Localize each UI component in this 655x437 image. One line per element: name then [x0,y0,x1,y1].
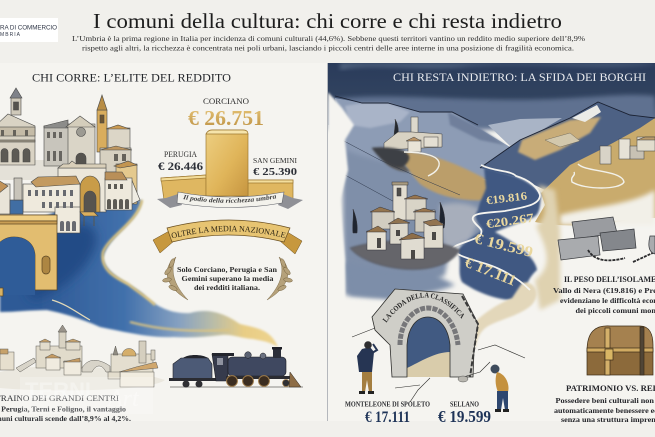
road values [465,192,533,286]
panel: chi resta indietro [328,63,655,424]
heading: chi corre: CHI CORRE: L’ELITE DEL REDDITO [32,70,231,84]
panel: chi corre [0,74,303,422]
san gemini label: SAN GEMINI [253,156,297,165]
title: I comuni della cultura: chi corre e chi resta indietro [93,9,562,33]
illustration: worried figures [357,341,509,412]
palazzo [44,126,70,166]
ribbon: podio: Il podio della ricchezza umbra [183,194,276,203]
corciano label: CORCIANO [203,96,249,106]
left cream edge [328,92,354,300]
ribbon: podio [157,192,303,209]
san gemini value: € 25.390 [253,166,298,178]
perugia value: € 26.446 [158,161,203,173]
road values: €20.267 [485,211,535,231]
perugia label: PERUGIA [164,150,197,159]
podio chart [157,98,303,209]
icon: stone blocks with chain [558,217,655,262]
text: il peso dell'isolamento [553,274,655,315]
road values: € 19.599 [472,231,535,261]
text: oltre la media: Gemini superano la media [182,274,274,283]
illustration: Perugia city skyline [0,88,140,233]
gold tower [97,110,107,152]
text: oltre la media: Solo Corciano, Perugia e San [177,265,278,274]
text: patrimonio vs reddito [554,383,655,424]
logo: Camera di Commercio dell'Umbria: RA DI COMMERCIO [0,24,57,32]
laurel wreaths [162,257,293,300]
arch title: LA CODA DELLA CLASSIFICA [382,292,464,323]
watermark: Art [106,386,140,412]
intro text: rispetto agli altri, la ricchezza è concentrata nei poli urbani, lasciando i piccoli centri delle aree interne in una posizione di fragilità economica. [82,44,574,52]
illustration: lower village [350,182,460,269]
comune labels and values [345,402,491,426]
text: oltre la media [177,267,277,290]
road values: €19.816 [486,190,528,207]
heading: chi resta indietro: CHI RESTA INDIETRO: LA SFIDA DEI BORGHI [393,70,646,84]
cathedral [0,114,35,165]
podium blocks [161,130,293,200]
comune labels and values: € 19.599 [438,407,491,426]
front houses [23,184,80,212]
watercolor stream [0,200,278,347]
comune labels and values: € 17.111 [365,409,410,426]
illustration: small towns and viaduct [0,325,165,390]
mountains [335,96,655,310]
intro text [72,34,585,52]
bell tower [11,98,21,115]
illustration: upper villages [372,117,655,167]
comune labels and values: SELLANO [450,402,479,408]
icon: treasure chest [587,326,653,375]
stall [80,212,98,216]
illustration: golden arch [0,215,57,296]
banner: oltre la media nazionale: OLTRE LA MEDIA NAZIONALE [172,226,286,238]
text: il peso dell'isolamento: Vallo di Nera (€19.816) e Preci [553,286,655,295]
right cluster [108,128,130,150]
illustration: ruined arch [352,288,526,402]
watermark: TERNI [25,378,91,403]
illustration: steam locomotive [169,347,303,388]
river road [404,152,624,348]
panel divider [327,63,328,421]
front gate [58,168,106,212]
logo: Camera di Commercio dell'Umbria [0,18,58,42]
watermark [20,377,153,414]
road values: € 17.111 [462,255,518,290]
logo: Camera di Commercio dell'Umbria: MBRIA [0,32,21,38]
text: il traino dei grandi centri [0,396,131,422]
banner: oltre la media nazionale [152,220,302,254]
corciano value: € 26.751 [188,106,264,130]
dark sky [328,63,655,130]
right block [105,178,132,210]
text: oltre la media: dei redditi italiana. [194,283,260,292]
comune labels and values: MONTELEONE DI SPOLETO [345,402,430,408]
intro text: L’Umbria è la prima regione in Italia per incidenza di comuni culturali (44,6%). Sebbene questi territori vantino un reddito medio superiore dell’8,9% [72,34,585,43]
